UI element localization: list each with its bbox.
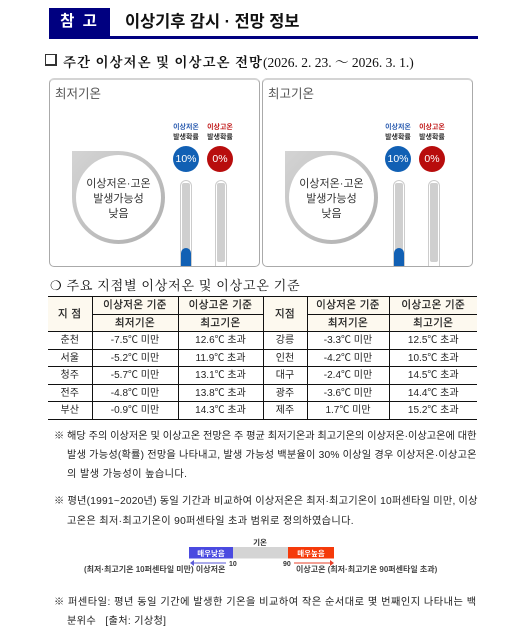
panel: highest temperature: [262, 78, 473, 267]
likelihood text: 발생가능성: [93, 193, 144, 205]
table: station thresholds: 14.4℃ 초과: [408, 388, 459, 399]
table: station thresholds: 제주: [276, 405, 294, 416]
very low band: [189, 547, 233, 558]
table: station thresholds: 청주: [61, 370, 79, 381]
caption: low side: (최저·최고기온 10퍼센타일 미만) 이상저온: [84, 564, 226, 574]
table: station thresholds: 이상고온 기준: [189, 299, 252, 311]
table: station thresholds: 최고기온: [200, 317, 241, 329]
note: definition: ※ 평년(1991~2020년) 동일 기간과 비교하여 이상저온은 최저·최고기온이 10퍼센타일 미만, 이상: [54, 496, 478, 507]
likelihood teardrop: [72, 151, 165, 244]
low probability gauge: [393, 180, 405, 272]
note: outlook meaning: 발생 가능성(확률) 전망을 나타내고, 발생 가능성 백분율이 30% 이상일 경우 이상저온·이상고온: [67, 450, 477, 461]
table: station thresholds: 지점: [275, 308, 295, 320]
middle band: [189, 547, 289, 558]
table: station thresholds: -3.3℃ 미만: [324, 335, 372, 346]
label: high probability: 이상고온: [207, 124, 233, 131]
table: station thresholds: 이상고온 기준: [401, 299, 465, 311]
label: low probability: [173, 123, 199, 141]
likelihood text: 이상저온·고온: [86, 178, 151, 190]
table: station thresholds: 13.8℃ 초과: [195, 388, 246, 399]
high probability gauge: [428, 180, 440, 272]
table: station thresholds: 최저기온: [115, 317, 155, 329]
label: low probability: 발생확률: [173, 134, 199, 141]
low probability value: [173, 146, 199, 172]
table: station thresholds: 광주: [276, 388, 294, 399]
label: high probability: [419, 123, 445, 141]
label: low probability: [385, 123, 411, 141]
note: outlook meaning: [54, 430, 477, 480]
table: station thresholds: 15.2℃ 초과: [408, 405, 459, 416]
note: outlook meaning: 의 발생 가능성이 높습니다.: [67, 469, 187, 480]
very high band: [288, 547, 334, 558]
arrow: high side: [283, 560, 334, 568]
table: station thresholds: 이상저온 기준: [103, 299, 167, 311]
arrow: low side: 10: [229, 561, 237, 568]
table: station thresholds: 14.5℃ 초과: [408, 370, 459, 381]
table: station thresholds: 이상저온 기준: [316, 299, 380, 311]
panel: lowest temperature: [49, 78, 260, 267]
table: station thresholds: -5.2℃ 미만: [111, 353, 159, 364]
likelihood text: 낮음: [108, 208, 129, 220]
table: station thresholds: 지 점: [58, 308, 81, 320]
note: definition: [54, 495, 478, 527]
header badge: 참 고: [60, 13, 99, 30]
panel title: 최고기온: [268, 87, 314, 101]
high probability value: 0%: [212, 153, 228, 165]
table: station thresholds: [48, 296, 477, 420]
panel title: 최저기온: [55, 87, 101, 101]
label: high probability: 발생확률: [419, 134, 445, 141]
likelihood text: [86, 178, 151, 220]
table: station thresholds: 12.5℃ 초과: [408, 335, 459, 346]
likelihood text: 이상저온·고온: [299, 178, 364, 190]
table: station thresholds: 춘천: [61, 335, 79, 346]
label: low probability: 발생확률: [385, 134, 411, 141]
table: station thresholds: -5.7℃ 미만: [111, 370, 159, 381]
label: low probability: 이상저온: [173, 124, 199, 131]
table: station thresholds: -0.9℃ 미만: [111, 405, 159, 416]
table: station thresholds: 10.5℃ 초과: [408, 353, 459, 364]
low probability value: [385, 146, 411, 172]
table: station thresholds: -2.4℃ 미만: [324, 370, 372, 381]
low probability gauge: [180, 180, 192, 272]
table: station thresholds: 최저기온: [328, 317, 368, 329]
label: high probability: [207, 123, 233, 141]
low probability value: 10%: [387, 153, 408, 165]
icon: section checkbox: [45, 54, 57, 66]
likelihood teardrop: [285, 151, 378, 244]
label: high probability: 발생확률: [207, 134, 233, 141]
table: station thresholds: 11.9℃ 초과: [196, 353, 245, 364]
header rule: [49, 36, 478, 39]
note: outlook meaning: ※ 해당 주의 이상저온 및 이상고온 전망은 주 평균 최저기온과 최고기온의 이상저온·이상고온에 대한: [54, 431, 476, 442]
table: station thresholds: 13.1℃ 초과: [195, 370, 246, 381]
very low band: 매우낮음: [197, 548, 225, 558]
note: percentile definition: [54, 596, 477, 627]
table: station thresholds: 부산: [61, 405, 79, 416]
table: station thresholds: -4.2℃ 미만: [324, 353, 372, 364]
likelihood text: 발생가능성: [306, 193, 357, 205]
table: station thresholds: -3.6℃ 미만: [324, 388, 372, 399]
note: definition: 고온은 최저·최고기온이 90퍼센타일 초과 범위로 정의하였습니다.: [67, 516, 354, 527]
label: low probability: 이상저온: [385, 124, 411, 131]
caption: high side: 이상고온 (최저·최고기온 90퍼센타일 초과): [296, 564, 438, 574]
note: percentile definition: 분위수 [출처: 기상청]: [67, 616, 166, 627]
note: percentile definition: ※ 퍼센타일: 평년 동일 기간에 발생한 기온을 비교하여 작은 순서대로 몇 번째인지 나타내는 백: [54, 597, 477, 608]
low probability value: 10%: [175, 153, 196, 165]
table: station thresholds: 최고기온: [413, 317, 453, 329]
very high band: 매우높음: [297, 548, 325, 558]
high probability value: [419, 146, 445, 172]
high probability gauge: [215, 180, 227, 272]
arrow: high side: 90: [283, 561, 291, 568]
table: station thresholds: 12.6℃ 초과: [195, 335, 246, 346]
table: station thresholds: 인천: [276, 353, 294, 364]
table: station thresholds: 대구: [276, 370, 294, 381]
header badge: [49, 8, 110, 36]
scale label: 기온: [253, 537, 267, 547]
table: station thresholds: 전주: [61, 388, 79, 399]
table: station thresholds: 강릉: [276, 335, 294, 346]
table heading: ❍ 주요 지점별 이상저온 및 이상고온 기준: [50, 278, 300, 293]
arrow: low side: [190, 560, 237, 568]
label: high probability: 이상고온: [419, 124, 445, 131]
likelihood text: 낮음: [321, 208, 342, 220]
table: station thresholds: -4.8℃ 미만: [111, 388, 159, 399]
likelihood text: [299, 178, 364, 220]
high probability value: [207, 146, 233, 172]
table: station thresholds: 서울: [61, 353, 79, 364]
table: station thresholds: -7.5℃ 미만: [111, 335, 159, 346]
high probability value: 0%: [424, 153, 440, 165]
page title: 이상기후 감시 · 전망 정보: [125, 13, 299, 31]
table: station thresholds: 1.7℃ 미만: [325, 405, 371, 416]
section heading: 주간 이상저온 및 이상고온 전망(2026. 2. 23. ～ 2026. 3. 1.): [63, 55, 414, 70]
diagram: percentile scale: [84, 537, 438, 574]
table: station thresholds: 14.3℃ 초과: [195, 405, 246, 416]
